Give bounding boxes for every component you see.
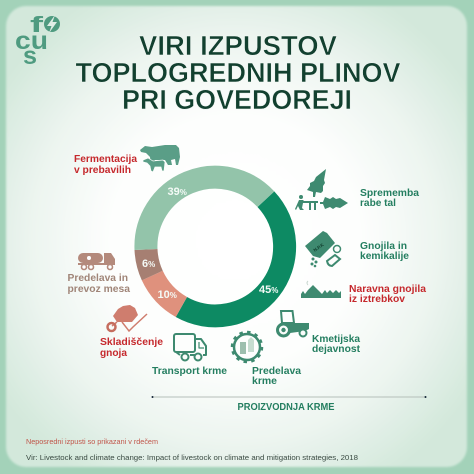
label: skladiščenje gnoja xyxy=(100,337,163,359)
icon: wheelbarrow xyxy=(108,305,147,331)
icon: tanker truck xyxy=(78,253,115,270)
label: predelava krme xyxy=(252,366,301,387)
label: predelava in prevoz mesa xyxy=(68,273,130,295)
label: skladiščenje gnoja: gnoja xyxy=(100,348,127,359)
label: naravna gnojila: Naravna gnojila xyxy=(349,284,426,295)
label: gnojila in kemikalije xyxy=(360,241,409,262)
label: sprememba rabe tal: rabe tal xyxy=(360,198,396,209)
title: VIRI IZPUSTOV xyxy=(139,30,337,61)
logo: focus: f xyxy=(30,12,44,37)
donut percentages xyxy=(142,186,278,301)
label: predelava krme: Predelava xyxy=(252,366,301,377)
label: skladiščenje gnoja: Skladiščenje xyxy=(100,337,163,348)
label: fermentacija xyxy=(74,154,137,176)
icon: trees and logger xyxy=(295,169,348,210)
logo: focus: s xyxy=(23,42,37,70)
label: predelava krme: krme xyxy=(252,376,277,387)
icon: fertilizer sack xyxy=(305,231,340,267)
segment: 10% xyxy=(152,276,181,307)
logo: focus: cu xyxy=(15,27,48,55)
icon: cow and calf xyxy=(140,145,180,172)
label: sprememba rabe tal xyxy=(360,188,419,209)
segment: 45% xyxy=(181,199,285,316)
label: transport krme: Transport krme xyxy=(152,366,227,377)
icon: fertilizer sack: N.P.K xyxy=(313,242,325,253)
donut percentages: 10% xyxy=(158,289,177,301)
donut percentages: 45% xyxy=(259,284,278,296)
title xyxy=(76,30,401,115)
donut chart xyxy=(146,177,285,316)
label: gnojila in kemikalije: kemikalije xyxy=(360,251,409,262)
label: naravna gnojila xyxy=(349,284,426,305)
logo: focus xyxy=(15,12,60,70)
label: predelava in prevoz mesa: Predelava in xyxy=(68,273,128,284)
note: direct emissions: Neposredni izpusti so prikazani v rdečem xyxy=(26,437,158,446)
icon: processing gear xyxy=(232,332,262,362)
title: TOPLOGREDNIH PLINOV xyxy=(76,57,401,88)
label: fermentacija: Fermentacija xyxy=(74,154,137,165)
label: sprememba rabe tal: Sprememba xyxy=(360,188,419,199)
label: fermentacija: v prebavilih xyxy=(74,165,131,176)
label: gnojila in kemikalije: Gnojila in xyxy=(360,241,407,252)
label: kmetijska dejavnost: Kmetijska xyxy=(312,334,360,345)
bracket line: feed production xyxy=(152,396,426,398)
segment: 6% xyxy=(146,250,152,276)
icon: manure heap xyxy=(301,281,341,298)
label: predelava in prevoz mesa: prevoz mesa xyxy=(68,284,130,295)
label: kmetijska dejavnost: dejavnost xyxy=(312,344,361,355)
segment: 39% xyxy=(146,177,266,250)
donut percentages: 39% xyxy=(168,186,187,198)
icon: truck xyxy=(174,334,206,360)
label: naravna gnojila: iz iztrebkov xyxy=(349,294,405,305)
label: proizvodnja krme: PROIZVODNJA KRME xyxy=(238,402,335,413)
icon: tractor xyxy=(278,311,309,336)
donut percentages: 6% xyxy=(142,258,155,270)
label: kmetijska dejavnost xyxy=(312,334,361,355)
source: Vir: Livestock and climate change: Impact of livestock on climate and mitigation strategies, 2018 xyxy=(26,453,358,462)
title: PRI GOVEDOREJI xyxy=(122,84,352,115)
